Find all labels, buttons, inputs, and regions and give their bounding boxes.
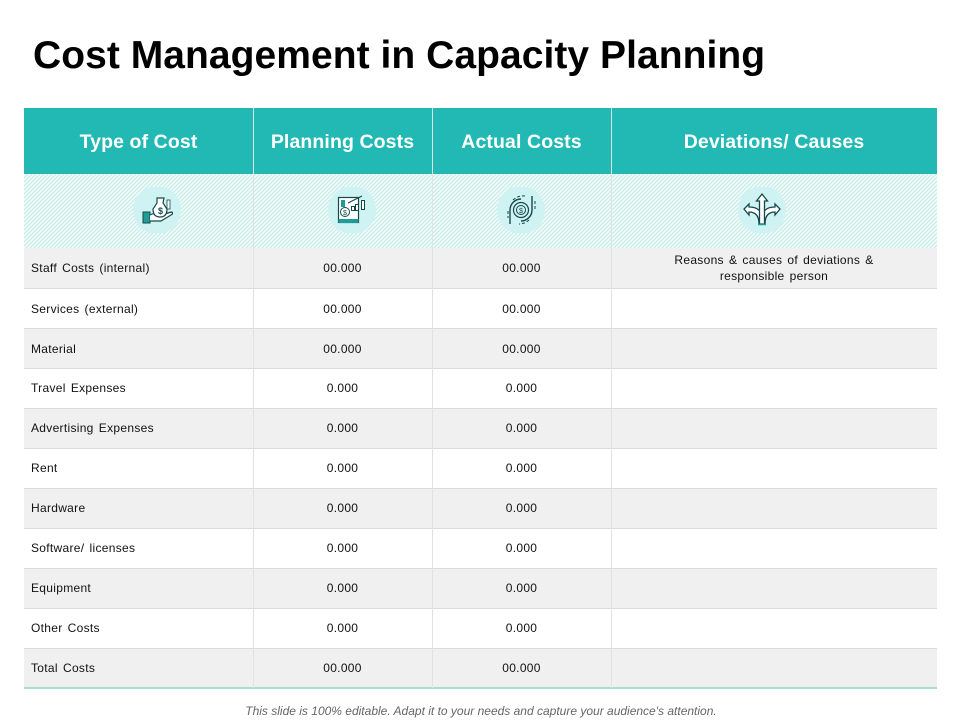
row: staff costs: [24, 248, 937, 289]
row: advertising: 0.000: [327, 421, 358, 435]
row: staff costs: 00.000: [323, 261, 362, 275]
row: software: Software/ licenses: [31, 541, 135, 555]
title: Cost Management in Capacity Planning: [33, 34, 765, 77]
row: software: 0.000: [327, 541, 358, 555]
row: rent: 0.000: [327, 461, 358, 475]
row: hardware: 0.000: [506, 501, 537, 515]
row: equipment: Equipment: [31, 581, 91, 595]
row: equipment: 0.000: [506, 581, 537, 595]
row: other costs: Other Costs: [31, 621, 100, 635]
row: hardware: 0.000: [327, 501, 358, 515]
header: deviations: Deviations/ Causes: [684, 131, 864, 153]
header: planning costs: Planning Costs: [271, 131, 414, 153]
table header: [24, 108, 937, 174]
row: software: [24, 529, 937, 569]
header: type of cost: Type of Cost: [80, 131, 197, 153]
row: material: [24, 329, 937, 369]
row: total costs: 00.000: [323, 661, 362, 675]
row: travel: [24, 369, 937, 409]
icon: chart book: $: [343, 210, 347, 217]
row: hardware: Hardware: [31, 501, 85, 515]
row: equipment: 0.000: [327, 581, 358, 595]
row: services: [24, 289, 937, 329]
row: staff costs: Reasons & causes of deviations &: [674, 253, 874, 267]
row: material: 00.000: [502, 342, 541, 356]
icon: three way arrows: [738, 187, 786, 233]
header: actual costs: Actual Costs: [461, 131, 582, 153]
row: hardware: [24, 489, 937, 529]
icon: chart book: [328, 187, 376, 233]
row: advertising: 0.000: [506, 421, 537, 435]
row: services: 00.000: [502, 302, 541, 316]
icon: money bag in hand: [133, 187, 181, 233]
row: total costs: Total Costs: [31, 661, 95, 675]
row: staff costs: 00.000: [502, 261, 541, 275]
row: services: Services (external): [31, 302, 138, 316]
row: total costs: 00.000: [502, 661, 541, 675]
row: staff costs: responsible person: [720, 269, 828, 283]
icon band: [24, 174, 937, 248]
row: advertising: Advertising Expenses: [31, 421, 154, 435]
row: material: Material: [31, 342, 76, 356]
row: rent: 0.000: [506, 461, 537, 475]
row: services: 00.000: [323, 302, 362, 316]
row: other costs: 0.000: [506, 621, 537, 635]
row: equipment: [24, 569, 937, 609]
icon: circular money arrows: $: [519, 208, 523, 215]
row: software: 0.000: [506, 541, 537, 555]
row: rent: [24, 449, 937, 489]
row: rent: Rent: [31, 461, 58, 475]
row: advertising: [24, 409, 937, 449]
icon: money bag in hand: $: [158, 206, 163, 216]
row: travel: 0.000: [506, 381, 537, 395]
row: travel: 0.000: [327, 381, 358, 395]
row: other costs: 0.000: [327, 621, 358, 635]
row: other costs: [24, 609, 937, 649]
row: travel: Travel Expenses: [31, 381, 126, 395]
row: total costs: [24, 649, 937, 689]
footer note: This slide is 100% editable. Adapt it to your needs and capture your audience's attention.: [245, 704, 717, 718]
row: material: 00.000: [323, 342, 362, 356]
row: staff costs: Staff Costs (internal): [31, 261, 150, 275]
icon: circular money arrows: [497, 187, 545, 233]
